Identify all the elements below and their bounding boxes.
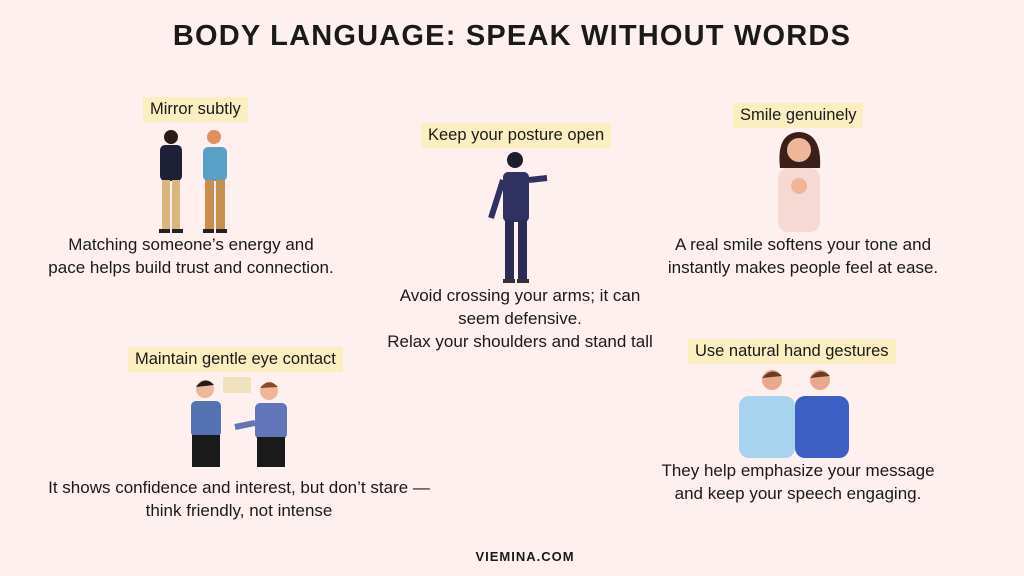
- label: eye contact: Maintain gentle eye contact: [135, 350, 336, 368]
- text: posture: Relax your shoulders and stand tall: [387, 332, 653, 351]
- text: eye contact: It shows confidence and interest, but don’t stare —: [48, 478, 430, 497]
- text: posture: [387, 286, 653, 351]
- label: hand gestures: Use natural hand gestures: [695, 342, 889, 360]
- text: hand gestures: They help emphasize your message: [661, 461, 935, 480]
- text: eye contact: [48, 478, 430, 520]
- label: mirror subtly: [143, 97, 248, 122]
- label: posture: [421, 123, 611, 148]
- icon: two men talking: [191, 377, 287, 467]
- icon: standing man in suit: [488, 152, 548, 283]
- text: mirror: pace helps build trust and connection.: [48, 258, 334, 277]
- label: smile: Smile genuinely: [740, 106, 856, 124]
- footer: VIEMINA.COM: [475, 549, 575, 564]
- text: hand gestures: [661, 461, 935, 503]
- label: hand gestures: [688, 339, 896, 364]
- icon: two men gesturing: [739, 370, 849, 458]
- text: smile: instantly makes people feel at ease.: [668, 258, 938, 277]
- icon: smiling woman: [778, 132, 820, 232]
- text: mirror: [48, 235, 334, 277]
- text: mirror: Matching someone’s energy and: [68, 235, 314, 254]
- text: smile: [668, 235, 938, 277]
- label: eye contact: [128, 347, 343, 372]
- text: posture: seem defensive.: [458, 309, 582, 328]
- label: smile: [733, 103, 863, 128]
- title: BODY LANGUAGE: SPEAK WITHOUT WORDS: [173, 20, 851, 52]
- text: posture: Avoid crossing your arms; it can: [400, 286, 640, 305]
- label: posture: Keep your posture open: [428, 126, 604, 144]
- icon: two standing men: [159, 130, 227, 233]
- label: mirror subtly: Mirror subtly: [150, 100, 241, 118]
- text: smile: A real smile softens your tone and: [675, 235, 931, 254]
- text: hand gestures: and keep your speech engaging.: [675, 484, 921, 503]
- text: eye contact: think friendly, not intense: [146, 501, 332, 520]
